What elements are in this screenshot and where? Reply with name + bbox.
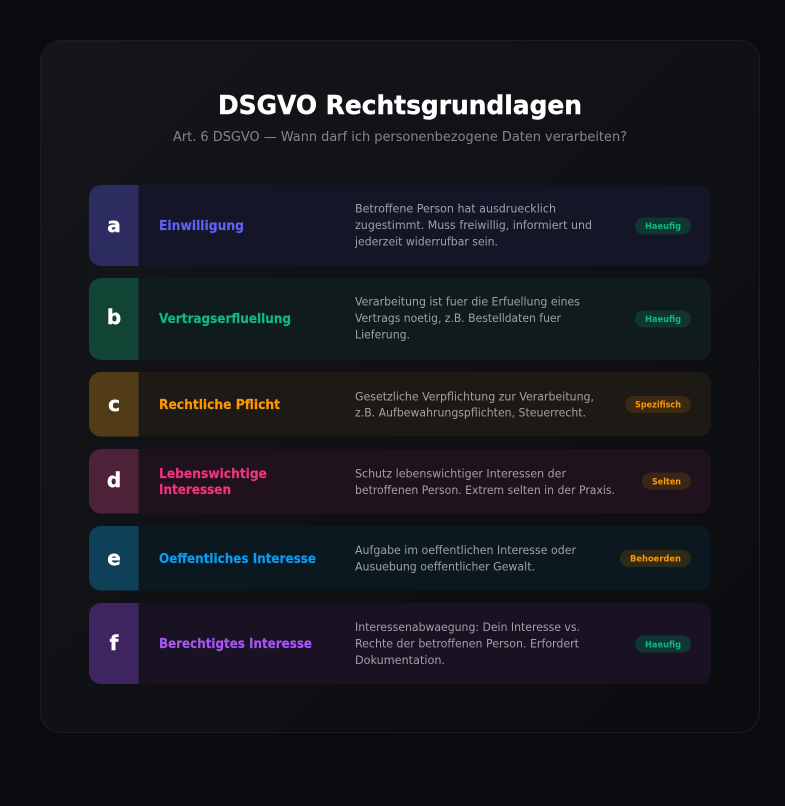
badge e xyxy=(620,550,691,567)
name b: Vertragserfluellung xyxy=(159,312,291,327)
letter block a: a xyxy=(107,213,121,237)
name a: Einwilligung xyxy=(159,219,244,234)
badge b: Haeufig xyxy=(645,314,681,325)
title: DSGVO Rechtsgrundlagen xyxy=(218,91,582,121)
description c: Gesetzliche Verpflichtung zur Verarbeitung, xyxy=(355,390,594,404)
description f: Interessenabwaegung: Dein Interesse vs. xyxy=(355,621,580,634)
description c xyxy=(355,390,594,420)
description d: betroffenen Person. Extrem selten in der Praxis. xyxy=(355,484,615,497)
description b: Lieferung. xyxy=(355,328,410,342)
description e: Aufgabe im oeffentlichen Interesse oder xyxy=(355,544,576,557)
badge c xyxy=(625,396,691,413)
row e: Oeffentliches Interesse xyxy=(89,526,711,590)
badge d: Selten xyxy=(652,476,681,488)
letter block b: b xyxy=(107,305,121,329)
letter block e: e xyxy=(107,546,121,570)
description f: Rechte der betroffenen Person. Erfordert xyxy=(355,638,580,650)
badge c: Spezifisch xyxy=(635,400,681,410)
badge d xyxy=(642,472,691,490)
letter block b xyxy=(89,278,138,360)
name d xyxy=(159,467,267,498)
letter block c: c xyxy=(108,392,120,416)
name f: Berechtigtes Interesse xyxy=(159,637,312,652)
letter block a xyxy=(89,185,138,266)
description c: z.B. Aufbewahrungspflichten, Steuerrecht. xyxy=(355,406,586,420)
description a: zugestimmt. Muss freiwillig, informiert und xyxy=(355,219,592,232)
description a: jederzeit widerrufbar sein. xyxy=(354,236,498,248)
description f: Dokumentation. xyxy=(355,654,445,667)
description b: Vertrags noetig, z.B. Bestelldaten fuer xyxy=(355,312,561,325)
description d: Schutz lebenswichtiger Interessen der xyxy=(355,468,566,480)
letter block f xyxy=(89,603,138,684)
name d: Interessen xyxy=(159,483,231,498)
name c: Rechtliche Pflicht xyxy=(159,398,281,413)
letter block f: f xyxy=(110,631,119,655)
badge b xyxy=(635,310,691,328)
name e: Oeffentliches Interesse xyxy=(159,552,316,567)
description b: Verarbeitung ist fuer die Erfuellung eines xyxy=(355,296,580,308)
description f xyxy=(355,621,580,667)
description a: Betroffene Person hat ausdruecklich xyxy=(355,202,556,216)
row c: Rechtliche Pflicht xyxy=(89,372,711,436)
row d: Lebenswichtige Interessen xyxy=(89,449,711,514)
description e xyxy=(355,544,576,574)
letter block c xyxy=(89,372,138,436)
badge f: Haeufig xyxy=(645,640,681,650)
description e: Ausuebung oeffentlicher Gewalt. xyxy=(355,560,535,574)
badge e: Behoerden xyxy=(630,554,681,564)
badge f xyxy=(635,636,691,652)
row a: Einwilligung xyxy=(89,185,711,266)
description b xyxy=(355,296,580,342)
badge a xyxy=(635,218,691,234)
letter block e xyxy=(89,526,138,590)
letter block d xyxy=(89,449,138,514)
badge a: Haeufig xyxy=(645,221,681,232)
description a xyxy=(354,202,592,248)
row b: Vertragserfuellung xyxy=(89,278,711,360)
panel: main card xyxy=(40,40,760,732)
subtitle: Art. 6 DSGVO — Wann darf ich personenbezogene Daten verarbeiten? xyxy=(173,130,627,145)
description d xyxy=(355,468,615,497)
name d: Lebenswichtige xyxy=(159,467,267,482)
letter block d: d xyxy=(107,468,121,492)
row f: Berechtigtes Interesse xyxy=(89,603,711,684)
